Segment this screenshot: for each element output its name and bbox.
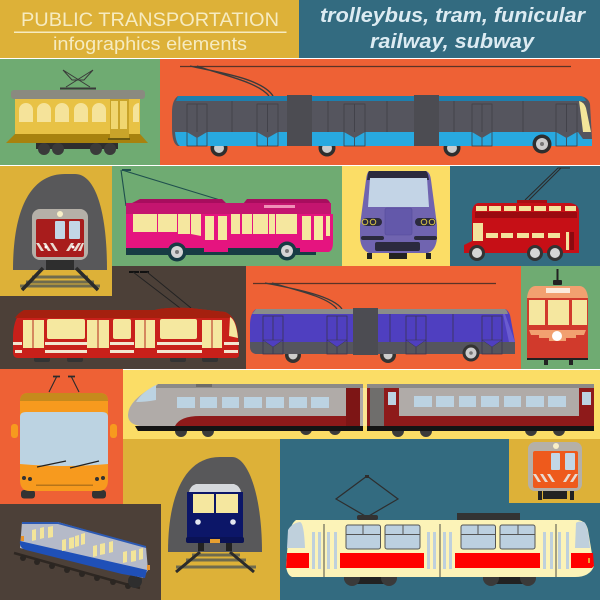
panel: small orange subway xyxy=(509,439,600,503)
subtitle xyxy=(320,5,586,53)
high speed train xyxy=(128,384,594,437)
panel: purple trolleybus xyxy=(246,266,521,369)
funicular railway xyxy=(14,522,150,589)
panel: tunnel red subway xyxy=(0,166,112,296)
tunnel with navy subway train xyxy=(168,457,262,572)
panel: purple train xyxy=(342,166,450,266)
subtitle: railway, subway xyxy=(370,31,535,53)
panel: vintage tram front xyxy=(521,266,600,369)
panel: red tram xyxy=(0,266,246,369)
subtitle: trolleybus, tram, funicular xyxy=(320,5,586,27)
panel: orange bus front xyxy=(0,369,123,504)
panel: subtitle background xyxy=(299,0,600,58)
panel: modern tram xyxy=(280,439,600,600)
panel: high speed train xyxy=(123,370,600,439)
panel: tunnel navy subway xyxy=(123,439,280,600)
red tram xyxy=(13,272,239,362)
panel: blue trolleybus xyxy=(160,59,600,165)
red double decker trolleybus xyxy=(464,168,579,261)
small orange subway train xyxy=(528,442,582,500)
panel: vintage tram xyxy=(0,59,160,165)
panel: funicular xyxy=(0,504,161,600)
panel: pink trolleybus xyxy=(112,166,342,266)
title xyxy=(14,9,286,54)
heading: public transportation: PUBLIC TRANSPORTATION xyxy=(21,9,279,31)
vintage tram xyxy=(6,70,148,155)
blue articulated trolleybus xyxy=(172,66,592,156)
panel: title background xyxy=(0,0,299,58)
purple articulated trolleybus xyxy=(250,283,515,363)
pink trolleybus xyxy=(121,170,333,262)
vintage tram front view xyxy=(527,269,588,365)
subheading: infographics elements: infographics elements xyxy=(53,34,247,54)
tunnel with red subway train xyxy=(13,174,107,290)
modern tram xyxy=(286,475,594,586)
panel: double decker xyxy=(450,166,600,266)
purple train front xyxy=(360,171,437,259)
orange bus front view xyxy=(11,376,117,498)
